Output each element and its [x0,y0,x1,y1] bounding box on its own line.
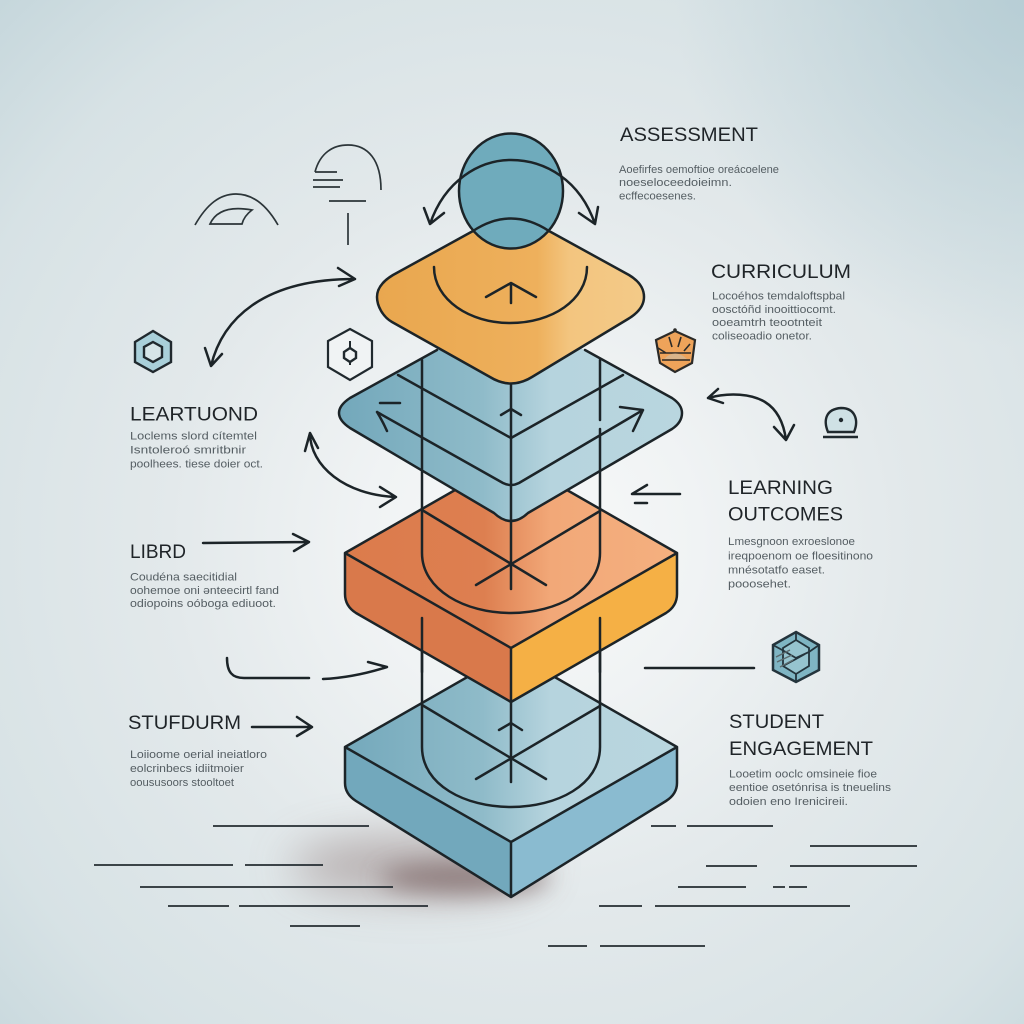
decorative ground lines left [94,826,428,926]
icon: teal hexagon [135,331,171,372]
text block: librd: oohemoe oni ənteecirtl fand [130,585,279,597]
text block: learning outcomes [728,477,873,590]
text block: leartuond: Loclems slord cítemtel [130,430,257,442]
text block: stufdurm: eolcrinbecs idiitmoier [130,763,244,775]
arrow: learning outcomes [632,485,680,503]
icon: eye with line [823,408,858,437]
text block: leartuond: LEARTUOND [130,404,258,426]
text block: assessment: ecffecoesenes. [619,190,696,202]
text block: student engagement: ENGAGEMENT [729,738,873,760]
arrow: curve to blue diamond [305,433,396,507]
text block: leartuond: poolhees. tiese doier oct. [130,458,263,470]
arrow: librd [203,534,309,551]
text block: assessment: Aoefirfes oemoftioe oreácoelene [619,164,779,176]
icon: orange badge [656,328,695,372]
text block: curriculum: coliseoadio onetor. [712,330,812,342]
text block: curriculum: ooeamtrh teootnteit [712,317,822,329]
ground shadow [290,836,550,896]
bottom blue block [345,618,677,897]
text block: leartuond: Isntoleroó smritbnir [130,444,246,456]
vertical connectors with U curve [422,360,600,613]
text block: student engagement [729,711,892,808]
text block: student engagement: STUDENT [729,711,824,733]
orange block [345,458,677,702]
top orange diamond [377,218,644,384]
connector line: student engagement [645,667,754,669]
text block: stufdurm: Loiioome oerial ineiatloro [130,749,267,761]
assessment circle [459,134,563,248]
text block: assessment [619,124,779,202]
icon: teal cube [773,632,819,682]
text block: assessment: ASSESSMENT [620,124,758,146]
text block: librd [130,541,279,610]
text block: learning outcomes: mnésotatfo easet. [728,564,825,576]
text block: curriculum: CURRICULUM [711,261,851,283]
text block: librd: odiopoins oóboga ediuoot. [130,598,276,610]
text block: student engagement: eentioe osetónrisa is tneuelins [729,782,892,794]
arrow: stufdurm [252,717,312,736]
icon: outlined hexagon [328,329,372,380]
text block: leartuond [130,404,263,470]
text block: student engagement: odoien eno Irenicireii. [729,796,848,808]
text block: curriculum: oosctóñd inooittiocomt. [712,304,836,316]
arrow: right double curve [708,389,794,440]
text block: assessment: noeseloceedoieimn. [619,177,732,189]
upper blue diamond [339,310,682,521]
text block: stufdurm: ooususoors stooltoet [130,777,234,789]
text block: student engagement: Looetim ooclc omsineie fioe [729,768,877,780]
text block: stufdurm [128,712,267,789]
orange diamond inner arc and arrow [434,267,587,323]
text block: learning outcomes: Lmesgnoon exroeslonoe [728,536,855,548]
arrow: double curve left [205,268,355,366]
text block: librd: LIBRD [130,541,186,563]
icon: dome with lines [313,145,381,245]
circular arrows around circle [424,160,598,224]
text block: librd: Coudéna saecitidial [130,572,237,584]
diamond edge over circle [473,218,549,231]
text block: curriculum [711,261,851,342]
icon: arch gauge [195,194,278,225]
text block: learning outcomes: OUTCOMES [728,504,843,526]
decorative ground lines right [548,826,917,946]
text block: stufdurm: STUFDURM [128,712,241,734]
text block: learning outcomes: pooosehet. [728,578,791,590]
text block: learning outcomes: ireqpoenom oe floesitinono [728,550,873,562]
arrow: hook [227,658,387,679]
text block: learning outcomes: LEARNING [728,477,833,499]
text block: curriculum: Locoéhos temdaloftspbal [712,290,845,302]
